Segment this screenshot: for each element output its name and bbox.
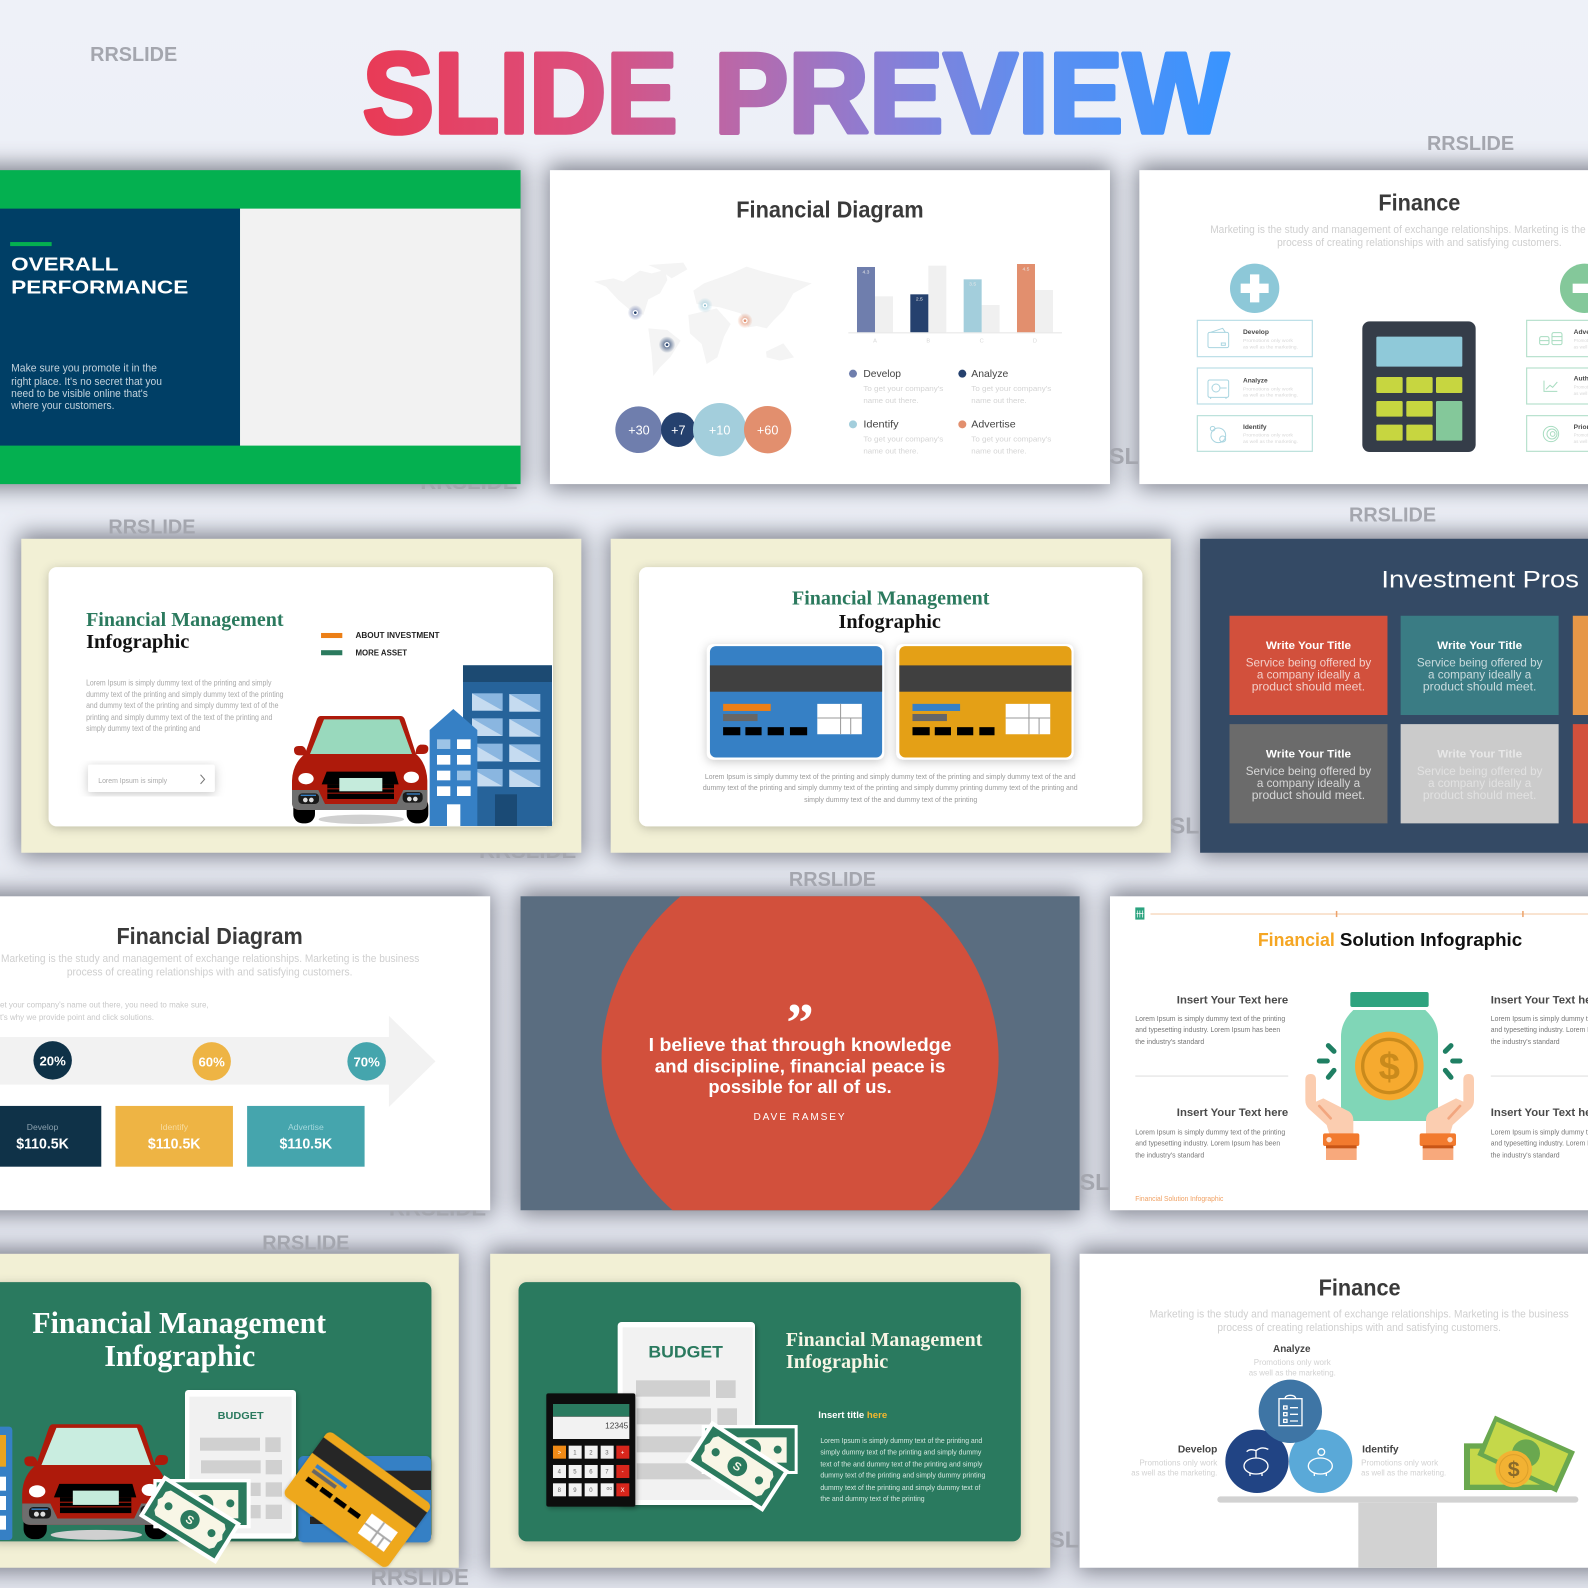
panel: financial diagram slide with map (550, 170, 1110, 484)
value cards: Advertise (288, 1122, 324, 1132)
author: DAVE RAMSEY (753, 1112, 845, 1123)
heading: Investment Pros (1381, 566, 1579, 593)
value cards: Identify (160, 1122, 189, 1132)
calculator: 9 (573, 1488, 577, 1494)
header rule (1150, 911, 1588, 917)
balance illustration (1217, 1380, 1578, 1568)
icon circles (1225, 1380, 1352, 1493)
legend (321, 630, 440, 657)
calculator and feature boxes: Promotions only work (1243, 338, 1294, 343)
left text blocks: the industry's standard (1135, 1151, 1204, 1160)
quote mark: ” (786, 992, 814, 1053)
watermarks: RRSLIDE (1427, 132, 1514, 155)
body text (10, 363, 162, 412)
plus and minus icons (1230, 264, 1588, 313)
heading (786, 1329, 983, 1373)
labels: as well as the marketing. (1249, 1367, 1336, 1377)
panel: finance balance slide (1080, 1254, 1588, 1568)
bar chart: D (1033, 338, 1037, 344)
tile text: a company ideally a (1257, 776, 1360, 790)
labels: Promotions only work (1139, 1457, 1218, 1467)
calculator and feature boxes (1197, 264, 1588, 452)
right text blocks (1491, 995, 1588, 1160)
money and coin (1464, 1416, 1575, 1493)
body text: dummy text of the printing and simply dummy text of the printing and simply dummy printing dummy text of the printing and (703, 783, 1078, 792)
box labels: Develop (1243, 329, 1269, 336)
left text blocks: Insert Your Text here (1177, 995, 1288, 1007)
calculator and feature boxes: Promotions only work (1243, 433, 1294, 438)
watermarks: RRSLIDE (1349, 504, 1436, 527)
calculator: 4 (558, 1470, 562, 1476)
labels: as well as the marketing. (1131, 1468, 1217, 1478)
quote (649, 1034, 951, 1097)
calculator: - (622, 1470, 624, 1476)
calculator and feature boxes: as well as the marketing. (1243, 393, 1298, 398)
panel: financial diagram slide with arrow (0, 896, 490, 1210)
heading: Financial Management (86, 609, 284, 631)
value cards: $110.5K (148, 1135, 201, 1152)
legend: name out there. (863, 447, 919, 456)
tile text: Service being offered by (1246, 764, 1372, 778)
tiles (1229, 616, 1588, 823)
bar chart: B (926, 338, 930, 344)
labels: Analyze (1273, 1344, 1311, 1355)
heading: Finance (1319, 1274, 1401, 1300)
tile text: a company ideally a (1428, 776, 1532, 790)
watermarks: SLIDE (1109, 443, 1178, 469)
description: et your company's name out there, you need to make sure, (0, 1000, 209, 1010)
heading: OVERALL (11, 253, 118, 274)
tile text: Service being offered by (1417, 655, 1543, 669)
subtitle: process of creating relationships with and satisfying customers. (1217, 1322, 1501, 1334)
tile text: product should meet. (1423, 788, 1536, 802)
body text (820, 1436, 985, 1503)
panel: financial management slide with car (21, 539, 581, 853)
right text blocks: the industry's standard (1491, 1151, 1560, 1160)
panel: budget slide (490, 1254, 1050, 1568)
bubbles: +60 (757, 423, 778, 437)
heading: Financial (1258, 930, 1335, 950)
subtitle: process of creating relationships with and satisfying customers. (67, 966, 352, 978)
panel: financial management cover slide (0, 1254, 459, 1569)
tile text: product should meet. (1252, 788, 1365, 802)
budget sheet (185, 1390, 296, 1539)
body text: text of the and dummy text of the printing and simply (820, 1459, 983, 1468)
legend: name out there. (863, 396, 919, 405)
budget sheet (618, 1322, 755, 1505)
watermarks: RRSLIDE (789, 868, 876, 891)
subtitle: Marketing is the study and management of exchange relationships. Marketing is the business (1, 953, 420, 965)
watermarks: RRSLIDE (262, 1232, 350, 1255)
watermarks: RRSLIDE (389, 1197, 486, 1220)
tile text: Write Your Title (1266, 640, 1351, 652)
heading: Financial Diagram (736, 197, 924, 223)
legend (849, 369, 1052, 456)
box labels: Identify (1243, 424, 1267, 431)
heading (792, 588, 990, 633)
calculator: 00 (607, 1486, 612, 1492)
heading: Infographic (839, 611, 941, 633)
tile text: Service being offered by (1417, 764, 1543, 778)
title: PREVIEW (714, 30, 1228, 158)
legend: To get your company's (971, 435, 1052, 444)
legend: Develop (863, 369, 901, 380)
tile text: Write Your Title (1266, 749, 1351, 761)
tile text: product should meet. (1252, 680, 1365, 694)
watermarks: SLIDE (1080, 1169, 1148, 1195)
panel: quote slide (521, 896, 1080, 1210)
footer note: Financial Solution Infographic (1135, 1195, 1224, 1203)
calculator: 2 (589, 1450, 593, 1456)
heading: Financial Diagram (116, 923, 303, 949)
value cards (0, 1106, 365, 1167)
calculator: 1 (573, 1450, 577, 1456)
illustration: coin jar and hands (1305, 992, 1474, 1160)
panel: credit cards slide (611, 539, 1171, 853)
left text blocks: and typesetting industry. Lorem Ipsum has been (1135, 1025, 1280, 1034)
bar chart: C (980, 338, 984, 344)
tile text: a company ideally a (1257, 668, 1360, 682)
partial building (0, 1427, 12, 1540)
legend: MORE ASSET (355, 647, 408, 657)
body text: dummy text of the printing and simply dummy printing (820, 1471, 985, 1480)
legend: To get your company's (971, 384, 1052, 393)
heading: Financial Management (792, 588, 990, 610)
labels: Develop (1178, 1444, 1217, 1455)
yellow card (282, 1430, 432, 1569)
heading: Finance (1378, 190, 1460, 216)
budget sheet: BUDGET (648, 1342, 723, 1361)
calculator: 7 (605, 1470, 609, 1476)
bank notes (685, 1421, 798, 1512)
calculator: 6 (589, 1470, 593, 1476)
sheet icon (1135, 907, 1144, 920)
value cards: Develop (27, 1122, 59, 1132)
budget sheet: BUDGET (218, 1411, 264, 1422)
blue card (707, 644, 884, 760)
quote: I believe that through knowledge (649, 1034, 951, 1055)
body text (703, 772, 1078, 804)
panel: financial solution slide (1110, 896, 1588, 1210)
tile text: product should meet. (1423, 680, 1536, 694)
car (22, 1424, 168, 1540)
blue card (298, 1456, 431, 1542)
body text: dummy text of the printing and simply dummy text of (820, 1483, 981, 1492)
body text: Lorem Ipsum is simply dummy text of the printing and (820, 1436, 982, 1445)
heading: Infographic (86, 631, 189, 653)
watermarks: SLIDE (1170, 812, 1238, 838)
button: Lorem Ipsum is simply (98, 776, 167, 785)
bubbles (615, 403, 791, 456)
money and coin: $ (1508, 1458, 1520, 1482)
left text blocks: the industry's standard (1135, 1037, 1204, 1046)
body text: simply dummy text of the and dummy text of the printing (804, 795, 977, 804)
legend: name out there. (971, 447, 1027, 456)
bar chart (848, 264, 1062, 344)
labels: Promotions only work (1361, 1457, 1439, 1467)
title: SLIDE (363, 30, 678, 158)
percent badges: 60% (198, 1054, 225, 1069)
subtitle (1210, 224, 1588, 249)
left text blocks (1135, 995, 1288, 1160)
legend: Analyze (971, 369, 1008, 380)
calculator: + (621, 1450, 625, 1456)
calculator: 5 (573, 1470, 577, 1476)
tile text: Write Your Title (1437, 640, 1522, 652)
value cards: $110.5K (16, 1135, 69, 1152)
percent badges: 20% (39, 1053, 66, 1068)
heading (86, 609, 284, 653)
yellow card (896, 644, 1074, 760)
subtitle (1, 953, 420, 978)
body text: printing and simply dummy text of the text of the printing and (86, 713, 272, 722)
panel: investment pros slide (1200, 539, 1588, 853)
body text: right place. It's no secret that you (11, 376, 162, 388)
chart and map group (594, 263, 1062, 456)
illustration group (546, 1322, 798, 1512)
left text blocks: Insert Your Text here (1177, 1107, 1288, 1119)
title (363, 30, 1228, 158)
bar chart: 3.5 (969, 282, 976, 288)
line icons (1208, 328, 1562, 443)
watermarks: RRSLIDE (479, 840, 576, 863)
heading (32, 1306, 326, 1373)
heading: PERFORMANCE (11, 277, 188, 298)
heading: Financial Management (786, 1329, 983, 1351)
legend: To get your company's (863, 435, 944, 444)
labels: as well as the marketing. (1361, 1468, 1446, 1478)
subtitle (1149, 1309, 1569, 1334)
body text (86, 679, 284, 733)
calculator and feature boxes: Promotions only work (1243, 386, 1294, 391)
bar chart: 4.3 (863, 269, 870, 275)
calculator: > (558, 1450, 562, 1456)
left text blocks: Lorem Ipsum is simply dummy text of the printing (1135, 1014, 1285, 1023)
calculator: 12345 (605, 1421, 629, 1431)
watermarks: SLIDE (1049, 1526, 1118, 1552)
percent badges (33, 1041, 386, 1081)
calculator (1362, 321, 1476, 452)
panel: overall performance slide (0, 170, 521, 484)
calculator: 8 (558, 1488, 562, 1494)
bar chart: 2.5 (916, 297, 923, 303)
box labels: Analyze (1243, 377, 1268, 384)
body text: Make sure you promote it in the (11, 363, 157, 375)
bank notes (139, 1475, 251, 1564)
watermarks: RRSLIDE (420, 471, 518, 494)
bubbles: +10 (709, 423, 730, 437)
right text blocks: the industry's standard (1491, 1037, 1560, 1046)
watermarks: RRSLIDE (108, 516, 196, 539)
legend: To get your company's (863, 384, 944, 393)
legend: name out there. (971, 396, 1027, 405)
body text: dummy text of the printing and simply dummy text of the printing (86, 690, 284, 699)
body text: need to be visible online that's (11, 388, 148, 400)
bubbles: +7 (671, 423, 686, 437)
heading: Infographic (786, 1351, 888, 1373)
calculator and feature boxes: as well as the marketing. (1243, 439, 1298, 444)
body text: simply dummy text of the printing and simply dummy (820, 1447, 982, 1456)
heading (11, 253, 188, 298)
tile text: Write Your Title (1437, 749, 1522, 761)
world map (594, 263, 812, 376)
description (0, 1000, 209, 1022)
illustration: coin jar and hands: $ (1379, 1045, 1400, 1088)
illustration group (0, 1390, 432, 1569)
labels: Identify (1362, 1444, 1399, 1455)
description: t's why we provide point and click solutions. (0, 1012, 154, 1022)
labels: Promotions only work (1254, 1357, 1331, 1367)
calculator (546, 1393, 635, 1507)
tile text (1246, 640, 1543, 802)
arrow (0, 1016, 435, 1107)
panel: finance calculator slide (1139, 170, 1588, 484)
left text blocks: and typesetting industry. Lorem Ipsum has been (1135, 1138, 1280, 1147)
legend: Identify (863, 420, 899, 431)
tile text: a company ideally a (1428, 668, 1532, 682)
bubbles: +30 (628, 423, 650, 437)
watermarks: RRSLIDE (90, 43, 177, 66)
heading: Financial Management (32, 1306, 326, 1340)
calculator and feature boxes: as well as the marketing. (1243, 344, 1298, 349)
body text: Lorem Ipsum is simply dummy text of the printing and simply (86, 679, 272, 688)
feature boxes (1197, 320, 1588, 451)
bar chart: A (873, 338, 877, 344)
percent badges: 70% (353, 1054, 380, 1069)
subtitle: process of creating relationships with and satisfying customers. (1277, 237, 1562, 249)
body text: and dummy text of the printing and simply dummy text of of the (86, 701, 279, 710)
legend: ABOUT INVESTMENT (355, 630, 440, 640)
legend: Advertise (971, 420, 1016, 431)
left text blocks: Lorem Ipsum is simply dummy text of the printing (1135, 1127, 1285, 1136)
body text: where your customers. (10, 400, 114, 412)
quote: and discipline, financial peace is (655, 1056, 945, 1077)
body text: simply dummy text of the printing and (86, 724, 201, 733)
labels (1131, 1344, 1446, 1478)
stand (1217, 1496, 1578, 1568)
subheading: Insert title here (818, 1410, 888, 1421)
heading: Infographic (104, 1339, 255, 1373)
value cards: $110.5K (280, 1135, 332, 1152)
quote: possible for all of us. (708, 1076, 892, 1097)
heading: Solution Infographic (1340, 930, 1522, 950)
illustration: car and buildings (292, 665, 552, 826)
tile text: Service being offered by (1246, 655, 1372, 669)
calculator: 3 (605, 1450, 609, 1456)
body text: Lorem Ipsum is simply dummy text of the printing and simply dummy text of the printing and simply dummy text of the and (705, 772, 1076, 781)
box labels (1243, 329, 1588, 431)
button (88, 765, 215, 792)
bar chart: 4.5 (1023, 266, 1030, 272)
body text: the and dummy text of the printing (820, 1494, 925, 1503)
calculator: 0 (589, 1488, 593, 1494)
calculator: X (621, 1488, 625, 1494)
